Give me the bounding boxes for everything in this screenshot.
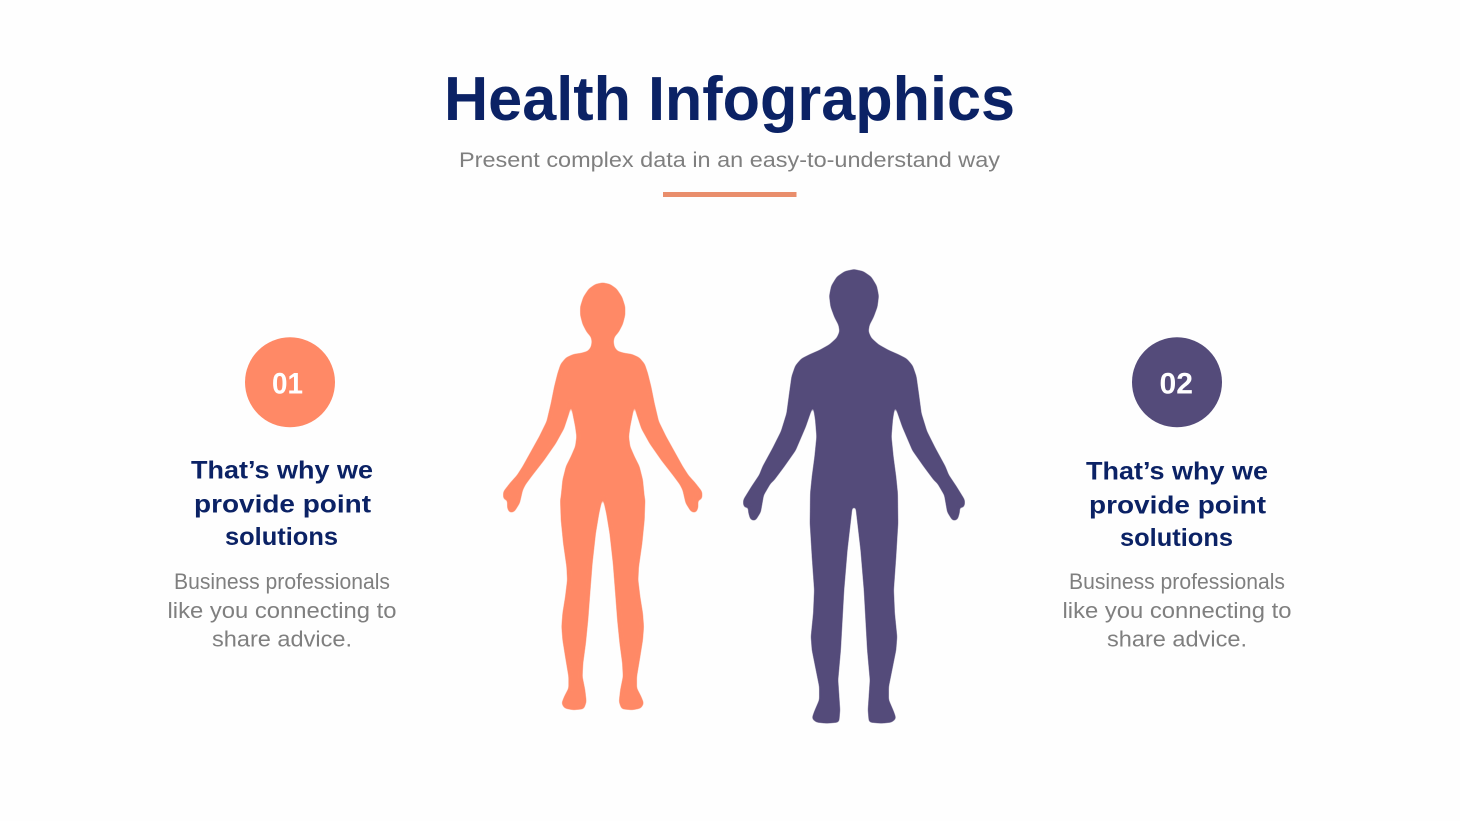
heading: left: solutions: [225, 523, 338, 551]
subtitle: Present complex data in an easy-to-understand way: [459, 148, 1000, 172]
heading: right: provide point: [1089, 492, 1267, 520]
panel: right item 02: [1062, 337, 1292, 652]
body text: left: Business professionals: [174, 569, 390, 594]
panel: left item 01: [168, 337, 396, 652]
body text: right: share advice.: [1107, 626, 1247, 652]
figure: male silhouette: [744, 270, 964, 723]
header: [444, 65, 1015, 197]
badge: 01: 01: [272, 368, 303, 400]
heading: left: [191, 456, 373, 551]
body text: right: [1062, 569, 1292, 652]
body text: left: [168, 569, 396, 652]
title: Health Infographics: [444, 65, 1015, 134]
heading: right: That’s why we: [1086, 458, 1268, 486]
body text: right: Business professionals: [1069, 569, 1285, 594]
badge: 01: [245, 337, 335, 427]
heading: right: [1086, 458, 1268, 552]
heading: left: That’s why we: [191, 456, 373, 484]
accent rule: [663, 192, 796, 197]
body text: left: share advice.: [212, 626, 352, 652]
badge: 02: [1132, 337, 1222, 427]
heading: left: provide point: [194, 490, 372, 518]
body text: right: like you connecting to: [1062, 598, 1292, 623]
body text: left: like you connecting to: [168, 598, 396, 623]
badge: 02: 02: [1160, 368, 1193, 400]
figure: female silhouette: [504, 283, 701, 709]
heading: right: solutions: [1120, 524, 1233, 552]
